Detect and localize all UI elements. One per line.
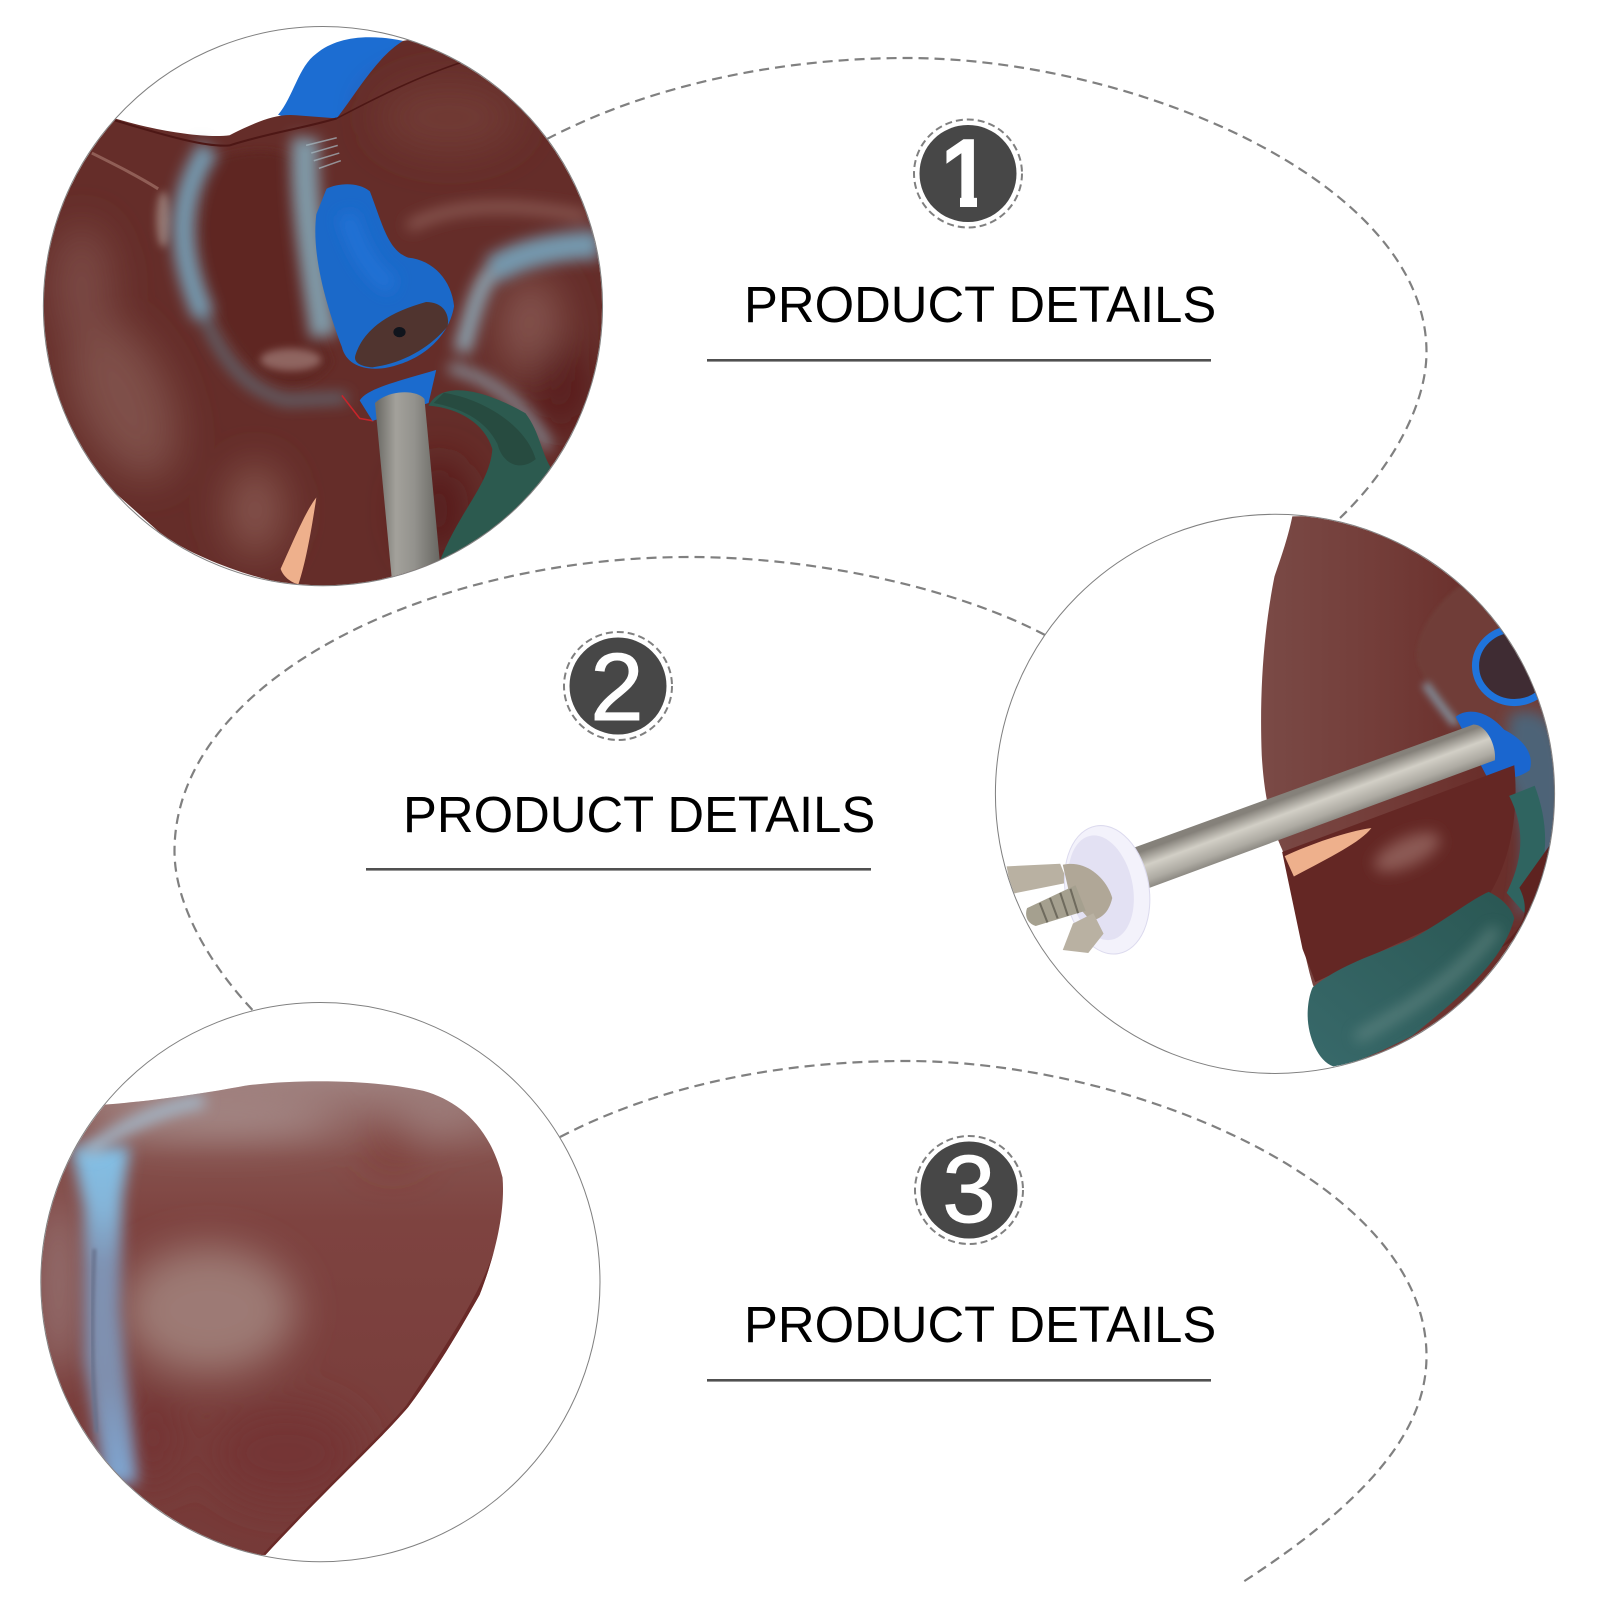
heading 2: PRODUCT DETAILS [403, 786, 875, 843]
collar [360, 370, 436, 421]
wing nut body [1063, 864, 1112, 921]
underline 2 [366, 868, 871, 871]
lobe highlights [40, 1096, 485, 1504]
metal rod [1132, 724, 1495, 890]
main blue vessel [315, 184, 454, 369]
dashed curve 3 [560, 1061, 1426, 1582]
orange streak [1285, 828, 1371, 877]
blue ring opening [1476, 629, 1553, 703]
liver body [1261, 516, 1554, 1064]
photo circle 2: liver with metal rod and wing nut [994, 514, 1556, 1074]
lower lobe shading [1282, 765, 1516, 982]
blue-grey seams [184, 138, 599, 449]
heading 1: PRODUCT DETAILS [744, 276, 1216, 333]
teal bumpy strip [1507, 786, 1545, 913]
bolt thread [1026, 885, 1086, 926]
underline 1 [707, 359, 1211, 362]
green gallbladder [429, 390, 554, 564]
dashed curve 2 [174, 557, 1045, 1011]
section 2 [366, 632, 875, 871]
surface ridges [92, 62, 462, 189]
badge 3 [915, 1136, 1023, 1244]
badge 3: 3 [942, 1136, 996, 1243]
wing nut lower wing [1063, 913, 1104, 953]
section 3 [707, 1136, 1216, 1382]
badge 2 [564, 632, 672, 741]
lower edge rim [265, 1249, 497, 1555]
orange streak [281, 497, 316, 584]
metal rod [375, 392, 440, 579]
badge 1 [914, 120, 1022, 228]
underline 3 [707, 1379, 1211, 1382]
badge 2: 2 [590, 634, 644, 741]
blue strip [71, 1147, 138, 1484]
upper lobe [1429, 586, 1548, 733]
vessel top [278, 37, 403, 122]
vessel opening [355, 302, 448, 367]
section 1 [707, 120, 1216, 362]
wing nut top wing [1007, 864, 1068, 894]
central lobe [204, 155, 323, 380]
badge 1: 1 [939, 121, 993, 228]
dark right shadow [1501, 704, 1554, 920]
white washer [1064, 825, 1150, 954]
heading 3: PRODUCT DETAILS [744, 1296, 1216, 1353]
photo circle 1: liver vessels close-up [42, 26, 604, 586]
lobe base [31, 1076, 520, 1565]
dashed curve 1 [547, 58, 1426, 518]
green gallbladder [1308, 892, 1514, 1066]
blue collar [1456, 712, 1531, 779]
liver base [44, 40, 602, 586]
photo circle 3: liver lobe [31, 1003, 600, 1565]
red wire [342, 395, 373, 421]
